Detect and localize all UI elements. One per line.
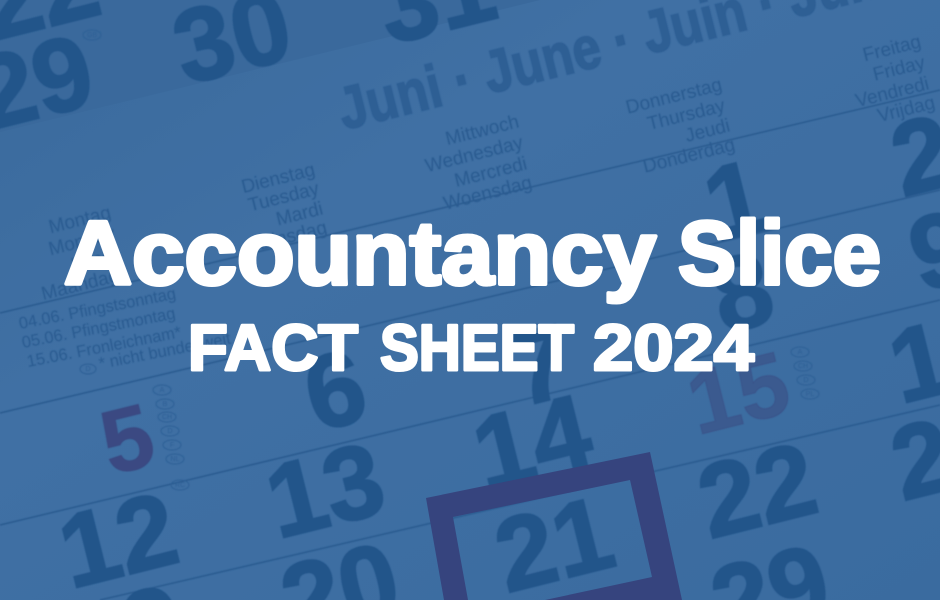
title block <box>64 204 881 384</box>
title: Slice <box>678 204 881 304</box>
country badges: RC <box>175 482 185 489</box>
holiday date numbers: 15 <box>678 333 799 455</box>
weekday labels: Jeudi <box>683 115 732 147</box>
weekday labels: Montag <box>47 202 113 238</box>
weekday labels: Donnerstag <box>624 74 724 119</box>
subtitle: FACT <box>188 311 358 384</box>
country badges: D <box>803 377 809 384</box>
subtitle: 2024 <box>593 311 754 384</box>
holiday notes: 04.06. Pfingstsonntag <box>17 285 177 333</box>
weekday labels: Vrijdag <box>875 92 937 127</box>
country badges: PL <box>806 391 814 398</box>
country badges: D <box>85 366 91 373</box>
subtitle: SHEET <box>380 311 574 384</box>
weekday labels: Vendredi <box>853 73 931 112</box>
weekday labels: Donderdag <box>641 134 737 178</box>
holiday notes <box>17 285 233 373</box>
weekday labels: Mittwoch <box>443 111 521 150</box>
calendar date numbers: 13 <box>255 421 395 561</box>
calendar date numbers: 7 <box>498 303 582 429</box>
country badges: CH <box>162 414 172 421</box>
title: Accountancy <box>64 204 656 304</box>
weekday labels: Monday <box>47 223 118 260</box>
calendar date numbers: 6 <box>293 328 377 454</box>
holiday date numbers <box>91 333 799 495</box>
weekday labels <box>39 31 937 305</box>
subtitle <box>188 311 754 384</box>
calendar date numbers: 14 <box>462 373 603 513</box>
calendar date numbers: 22 <box>687 421 827 561</box>
country badges: CH <box>798 363 808 370</box>
country badges: D <box>167 428 173 435</box>
calendar date numbers: 8 <box>700 230 784 356</box>
calendar date numbers: 1 <box>693 138 777 264</box>
holiday notes: * nicht bundesweit <box>97 330 233 373</box>
holiday notes: 15.06. Fronleichnam* <box>25 323 183 371</box>
weekday labels: Maandag <box>39 265 121 305</box>
country badges: A <box>160 387 165 394</box>
holiday notes: 05.06. Pfingstmontag <box>20 305 177 352</box>
title <box>64 204 881 304</box>
weekday labels: Dienstag <box>239 159 317 198</box>
country badges: A <box>798 349 803 356</box>
date highlight frame <box>426 452 682 600</box>
weekday labels: Friday <box>871 52 928 86</box>
weekday labels: Lundi <box>69 244 119 276</box>
holiday date numbers: 5 <box>91 385 164 495</box>
weekday labels: Woensdag <box>441 172 534 215</box>
weekday labels: Tuesday <box>246 178 322 216</box>
weekday labels: Thursday <box>645 95 728 135</box>
weekday labels: Dinsdag <box>256 217 329 255</box>
country badges: GB <box>87 32 97 39</box>
weekday labels: Mercredi <box>452 153 529 192</box>
weekday labels: Mardi <box>274 198 325 230</box>
weekday labels: Wednesday <box>423 132 526 177</box>
country badges <box>80 30 819 490</box>
country badges: B <box>163 401 168 408</box>
country badges: NL <box>171 456 180 463</box>
country badges: F <box>170 442 174 449</box>
weekday labels: Freitag <box>861 31 923 66</box>
